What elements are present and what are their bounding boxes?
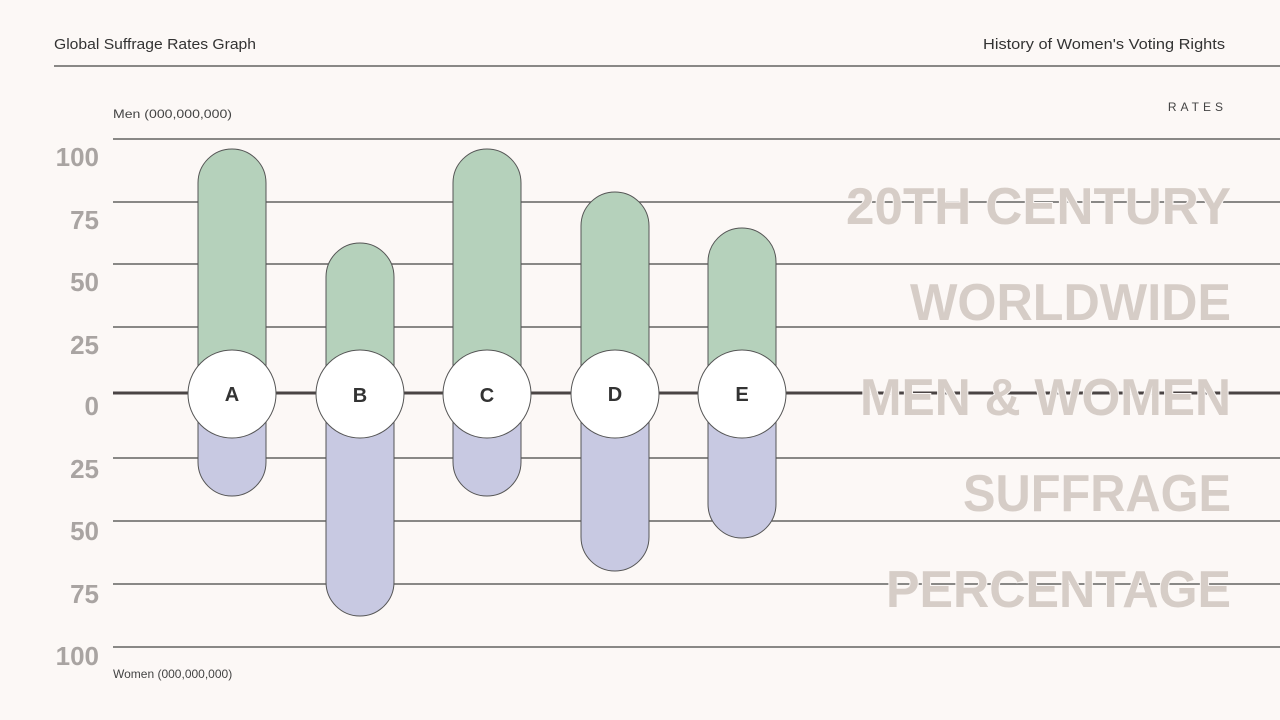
y axis labels: 100 — [56, 641, 99, 671]
circle C: C — [480, 385, 494, 407]
bar E — [708, 228, 776, 538]
circle A — [188, 350, 276, 438]
y axis labels: 0 — [85, 391, 99, 421]
circle A: A — [225, 384, 239, 406]
y axis labels: 25 — [70, 330, 99, 360]
bar A — [198, 149, 266, 496]
y axis labels: 100 — [56, 142, 99, 172]
axis label women: Women (000,000,000) — [113, 667, 232, 681]
grid lines — [113, 139, 1280, 647]
big title text: WORLDWIDE — [910, 274, 1231, 332]
bar D — [581, 192, 649, 571]
circle E: E — [735, 384, 749, 406]
circle D: D — [608, 384, 622, 406]
circle labels — [188, 350, 786, 438]
y axis labels: 50 — [70, 516, 99, 546]
circle D — [571, 350, 659, 438]
header right title: History of Women's Voting Rights — [983, 36, 1225, 53]
circle B — [316, 350, 404, 438]
y axis labels — [56, 142, 99, 671]
big title text — [846, 178, 1231, 619]
big title text: PERCENTAGE — [886, 561, 1231, 619]
bar C — [453, 149, 521, 496]
circle E — [698, 350, 786, 438]
y axis labels: 75 — [70, 205, 99, 235]
header left title: Global Suffrage Rates Graph — [54, 36, 256, 53]
axis label men: Men (000,000,000) — [113, 107, 232, 121]
big title text: MEN & WOMEN — [860, 369, 1231, 427]
circle C — [443, 350, 531, 438]
circle B: B — [353, 385, 367, 407]
y axis labels: 75 — [70, 579, 99, 609]
big title text: 20TH CENTURY — [846, 178, 1231, 236]
rates label: RATES — [1168, 100, 1227, 114]
bar B — [326, 243, 394, 616]
big title text: SUFFRAGE — [963, 465, 1231, 523]
y axis labels: 50 — [70, 267, 99, 297]
y axis labels: 25 — [70, 454, 99, 484]
bars — [198, 149, 776, 616]
